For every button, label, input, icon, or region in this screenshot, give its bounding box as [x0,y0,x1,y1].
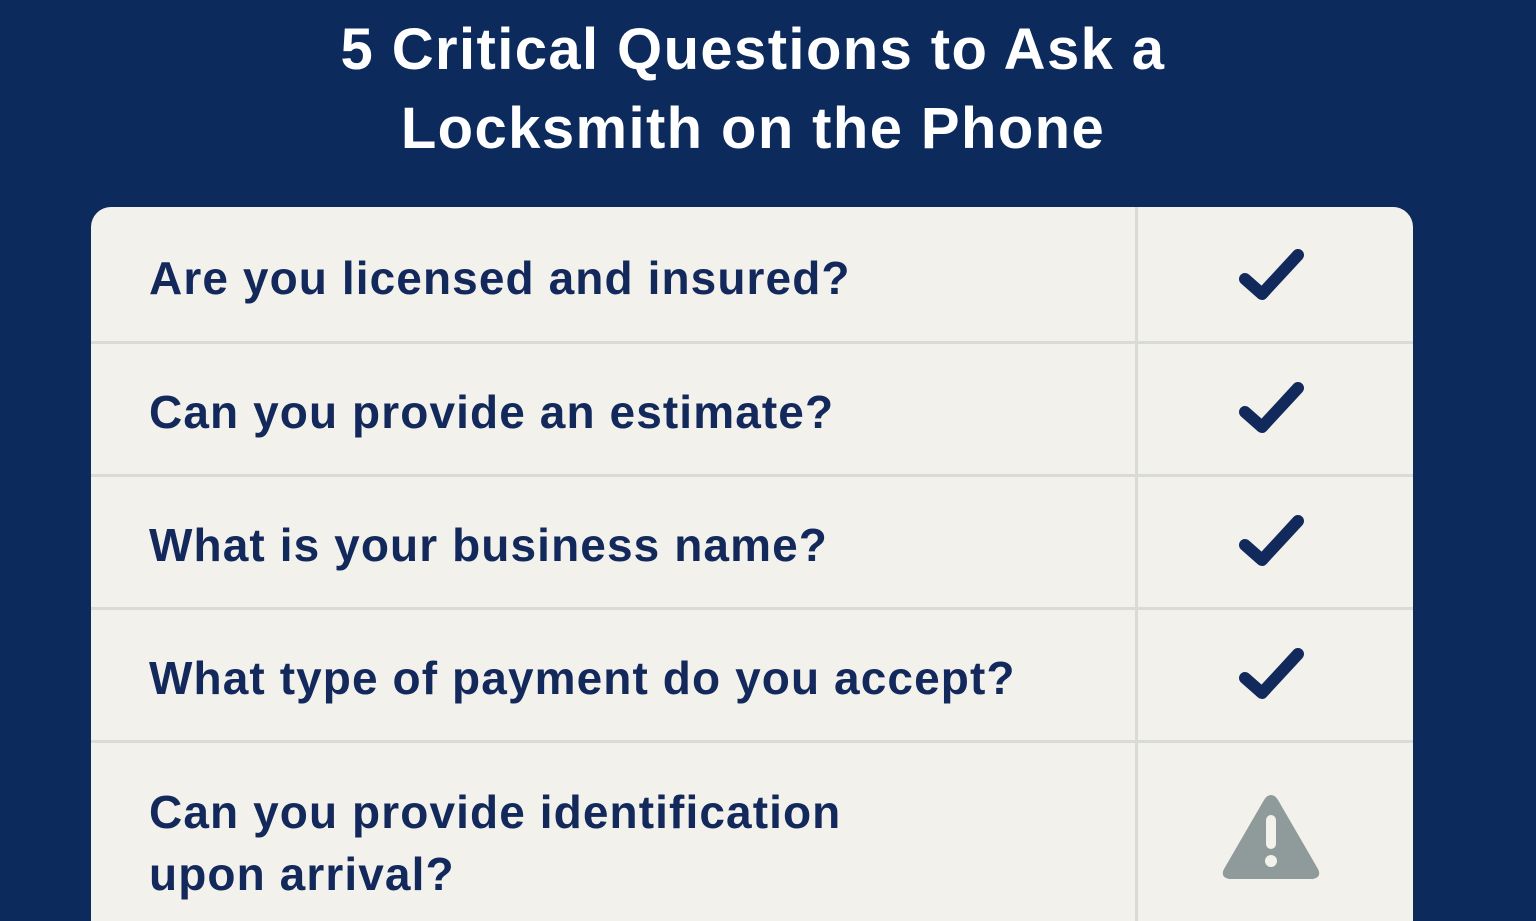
icon: check [1239,648,1304,699]
icon: check [1239,515,1304,566]
question 3: What is your business name? [149,519,828,571]
panel: questions table [91,207,1413,921]
icon: check [1239,249,1304,300]
question 1: Are you licensed and insured? [149,252,851,304]
title: Locksmith on the Phone [401,96,1105,161]
title [341,17,1165,161]
question 4: What type of payment do you accept? [149,652,1016,704]
question 2: Can you provide an estimate? [149,386,834,438]
row 5 [149,786,1320,900]
question 5: upon arrival? [149,848,455,900]
question 5 [149,786,841,900]
title: 5 Critical Questions to Ask a [341,17,1165,82]
row 4 [149,648,1304,704]
icon: warning [1222,795,1320,879]
icon: check [1239,382,1304,433]
row 1 [149,249,1304,304]
row 2 [149,382,1304,438]
row 3 [149,515,1304,571]
question 5: Can you provide identification [149,786,841,838]
